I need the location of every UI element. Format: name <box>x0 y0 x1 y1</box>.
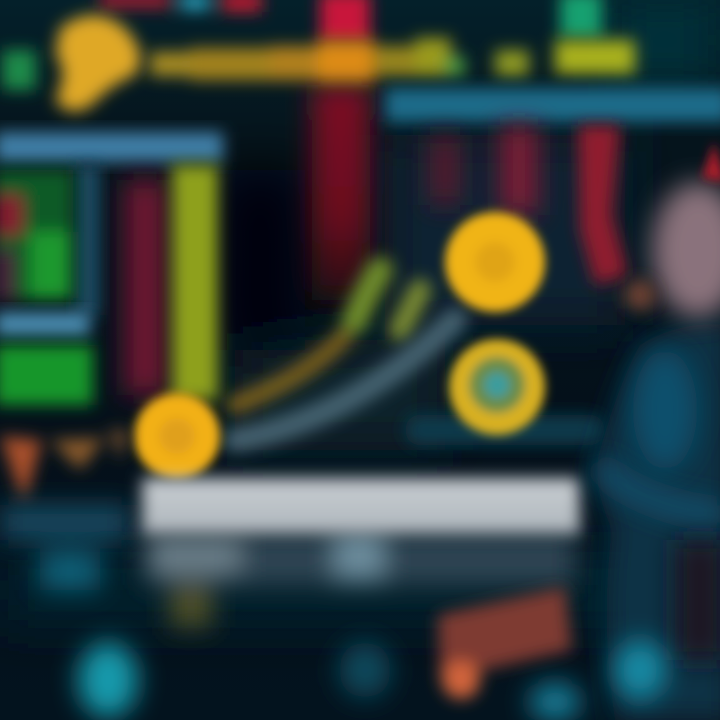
jacket arm highlight <box>595 465 720 515</box>
jacket chest highlight <box>633 350 697 470</box>
hand <box>624 279 656 311</box>
panel reflection <box>145 530 575 627</box>
central red column <box>312 85 370 300</box>
rising gold curve <box>235 270 420 405</box>
green blocks <box>0 170 73 300</box>
coin: lower right with teal centre <box>449 339 545 435</box>
presenter figure <box>595 142 720 720</box>
left panel header band <box>0 132 223 162</box>
light blue divider band <box>0 312 90 336</box>
teal glow spots, bottom <box>78 640 666 720</box>
olive bar <box>172 165 218 400</box>
crimson bar <box>125 180 165 395</box>
lower left teal blocks <box>0 505 130 590</box>
right header band <box>385 88 720 122</box>
body <box>597 324 720 720</box>
left panel bar chart <box>0 165 218 405</box>
coin: lower left <box>134 393 220 479</box>
head <box>652 182 720 318</box>
top strip of coloured markers <box>2 0 602 90</box>
panel frame post <box>76 165 100 315</box>
salmon block, bottom <box>438 587 572 699</box>
red hat tip <box>702 142 720 182</box>
hanging red stocking bar <box>578 125 628 285</box>
icon: golden ear <box>55 15 141 111</box>
lower green block <box>0 345 93 405</box>
white panel <box>142 478 580 534</box>
hanging red bars <box>430 125 538 215</box>
lower dark body <box>675 540 720 660</box>
rising blue-grey curve <box>235 320 590 440</box>
orange bunting, lower left <box>0 430 130 505</box>
coin: upper right <box>445 212 545 312</box>
title band: blurred yellow heading <box>150 38 635 82</box>
